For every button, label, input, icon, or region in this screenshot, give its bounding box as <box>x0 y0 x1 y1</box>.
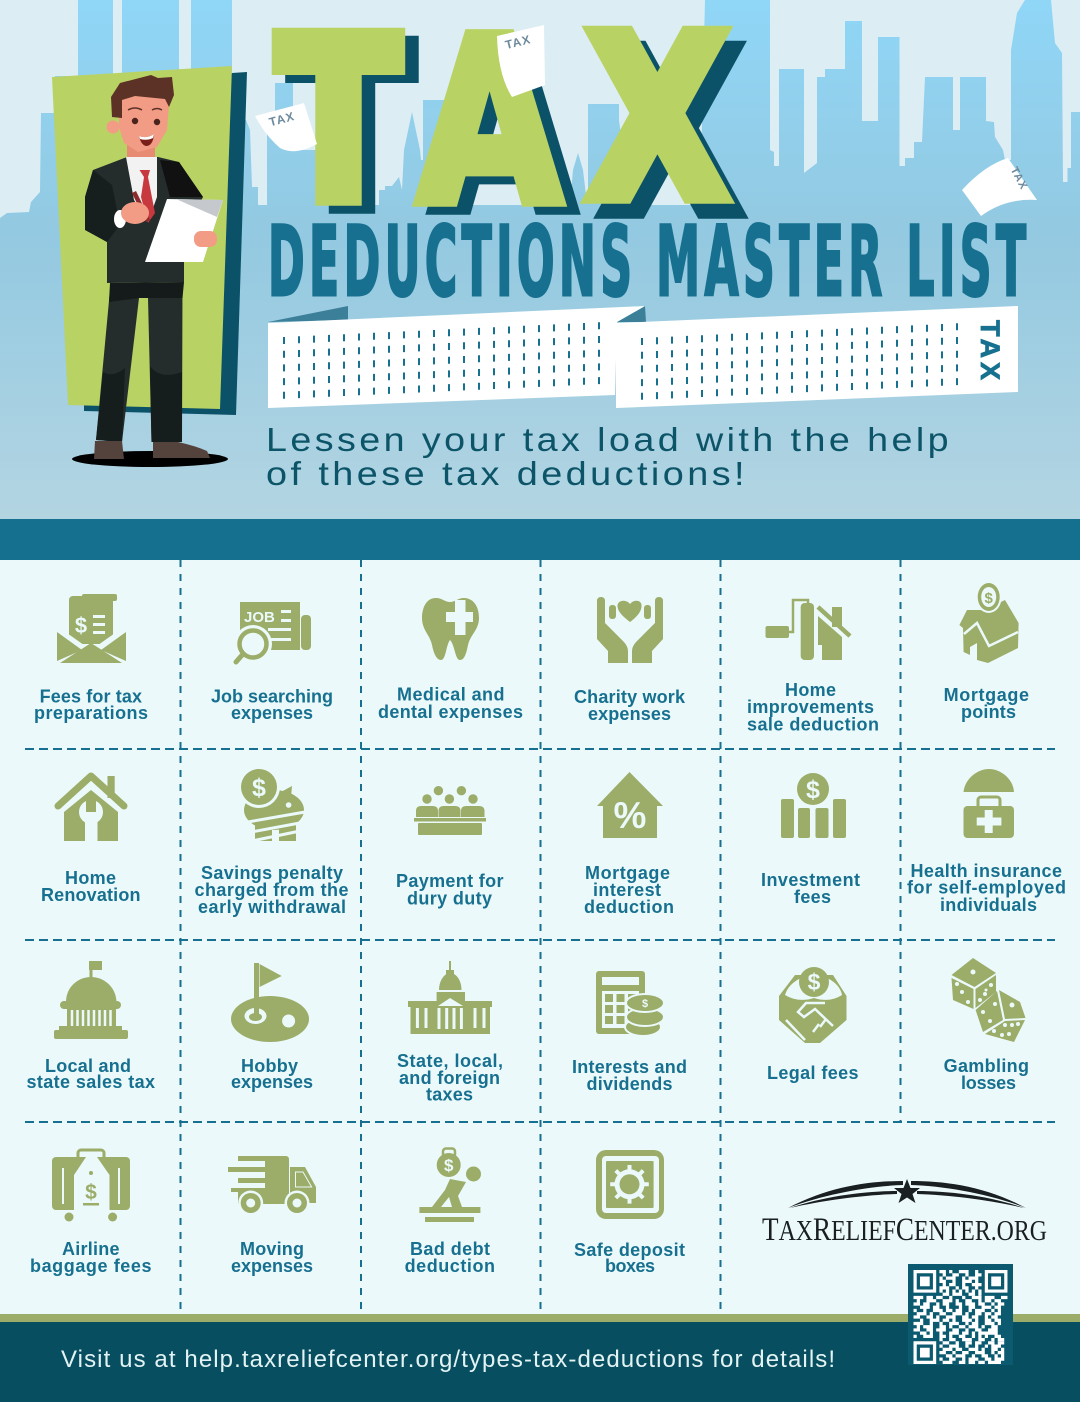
writing hand <box>114 202 149 228</box>
cell: job searching <box>211 602 333 723</box>
label: taxes <box>426 1084 473 1104</box>
label: baggage fees <box>30 1256 152 1276</box>
icon: piggy bank with coin: $ <box>252 774 266 802</box>
label <box>396 871 504 908</box>
cell: safe deposit boxes <box>574 1150 685 1276</box>
label: expenses <box>231 703 313 723</box>
icon: job newspaper and magnifier: JOB <box>244 609 275 626</box>
label: preparations <box>34 703 148 723</box>
cell: moving expenses <box>225 1151 316 1276</box>
jacket <box>85 157 203 283</box>
cell: fees for tax preparations <box>34 594 148 723</box>
tie <box>140 170 155 223</box>
label: Moving <box>240 1239 304 1259</box>
label: losses <box>961 1073 1016 1093</box>
icon: two dice <box>952 958 1026 1042</box>
icon: safe <box>596 1150 664 1219</box>
shirt <box>126 157 157 222</box>
label <box>26 1056 155 1092</box>
footer text: Visit us at help.taxreliefcenter.org/types-tax-deductions for details! <box>61 1346 835 1373</box>
label: Investment <box>761 870 860 890</box>
label <box>405 1239 495 1276</box>
cell: investment fees <box>761 770 860 907</box>
label <box>944 1056 1029 1093</box>
label: Safe deposit <box>574 1240 685 1260</box>
panel shadow <box>84 72 247 415</box>
icon: bars and coin: $ <box>806 776 820 804</box>
cell: state local foreign taxes <box>397 961 503 1104</box>
label: Fees for tax <box>40 686 142 706</box>
icon: government building <box>408 961 492 1034</box>
label <box>231 1239 313 1276</box>
flying paper on title <box>497 25 545 97</box>
label: for self-employed <box>907 878 1066 898</box>
label <box>761 870 860 907</box>
label <box>194 863 348 917</box>
flying paper left: TAX <box>268 109 296 129</box>
title TAX <box>277 0 740 264</box>
icon: envelope with bill: $ <box>75 613 87 638</box>
icon: house with coin: $ <box>985 590 994 607</box>
flying paper left <box>255 103 317 151</box>
icon: house with percent <box>597 772 663 838</box>
tagline: of these tax deductions! <box>266 455 748 492</box>
label <box>907 861 1066 915</box>
icon: umbrella over medical case <box>964 769 1014 838</box>
cell: legal fees <box>767 967 858 1083</box>
icon: delivery truck <box>225 1151 316 1216</box>
flying paper right: TAX <box>1008 165 1030 192</box>
clipboard <box>145 199 223 262</box>
shoes <box>94 441 210 459</box>
label: Savings penalty <box>201 863 343 883</box>
cell: mortgage interest <box>584 772 674 917</box>
icon: jury box <box>414 786 486 835</box>
logo: Tax Relief Center <box>762 1179 1047 1248</box>
icon: house with wrench <box>58 776 124 842</box>
city skyline <box>0 0 1080 519</box>
label <box>574 687 686 724</box>
label: deduction <box>584 897 674 917</box>
footer olive stripe <box>0 1314 1080 1322</box>
title letters <box>277 0 727 256</box>
cell: home improvements <box>747 600 879 734</box>
label: Airline <box>62 1239 120 1259</box>
cell: gambling losses <box>944 958 1029 1093</box>
man on green panel <box>52 66 247 467</box>
icon: hands holding heart <box>597 597 663 663</box>
label: expenses <box>231 1256 313 1276</box>
label <box>747 680 879 734</box>
label <box>572 1057 687 1094</box>
icon: tooth with cross <box>422 598 479 660</box>
panel: header <box>0 0 1080 519</box>
ribbon label: TAX <box>975 320 1005 380</box>
label <box>397 1051 503 1104</box>
ribbon ticks right <box>642 323 957 404</box>
label: Mortgage <box>944 685 1029 705</box>
cell: mortgage points <box>944 581 1029 722</box>
label: Medical and <box>397 684 504 704</box>
cell: local and state sales tax <box>26 961 155 1092</box>
label: boxes <box>605 1256 655 1276</box>
icon: house with coin <box>959 581 1019 663</box>
label: interest <box>593 880 661 900</box>
holding hand <box>194 231 217 247</box>
label: expenses <box>588 704 671 724</box>
cell: hobby expenses <box>231 963 313 1092</box>
title letter shadows: X <box>602 4 740 264</box>
icon: calculator and coins: $ <box>642 998 648 1010</box>
ground shadow <box>72 451 228 467</box>
label: dury duty <box>407 888 492 908</box>
icon: suitcase with tag: $ <box>85 1181 97 1204</box>
label: Hobby <box>241 1056 298 1076</box>
cell: payment for dury duty <box>396 786 504 908</box>
label <box>584 863 674 917</box>
teal band <box>0 519 1080 560</box>
label: early withdrawal <box>198 897 346 917</box>
label <box>211 686 333 723</box>
label <box>378 684 523 722</box>
icon: piggy bank with coin <box>238 766 305 841</box>
label: Charity work <box>574 687 686 707</box>
icon: domed capitol with flag <box>54 961 128 1039</box>
icon: person carrying debt weight: $ <box>444 1156 454 1175</box>
title letter shadows <box>291 0 740 264</box>
icon: house with percent: % <box>614 795 646 836</box>
pen <box>132 191 150 222</box>
label: points <box>961 702 1016 722</box>
tagline <box>266 421 952 492</box>
QR code <box>908 1264 1013 1365</box>
label <box>34 686 148 723</box>
label <box>30 1239 152 1276</box>
head <box>106 75 174 152</box>
cell: bad debt deduction <box>405 1148 495 1276</box>
label: Legal fees <box>767 1063 858 1083</box>
label <box>574 1240 685 1276</box>
label: Health insurance <box>910 861 1062 881</box>
icon: handshake and coin: $ <box>808 969 821 995</box>
logo: Tax Relief Center: TAXRELIEFCENTER.ORG <box>762 1212 1047 1248</box>
label: Bad debt <box>410 1239 490 1259</box>
label: Gambling <box>944 1056 1029 1076</box>
label: charged from the <box>194 880 348 900</box>
label: expenses <box>231 1072 313 1092</box>
cell: medical and dental <box>378 598 523 722</box>
flying paper on title: TAX <box>504 32 532 52</box>
label <box>41 868 140 905</box>
flying paper right <box>962 158 1037 216</box>
cell: interests and dividends <box>572 971 687 1094</box>
hair <box>111 75 174 118</box>
label: improvements <box>747 697 874 717</box>
cell: savings penalty <box>194 766 348 917</box>
cell: home renovation <box>41 776 140 905</box>
label: dividends <box>586 1074 672 1094</box>
label: deduction <box>405 1256 495 1276</box>
label: sale deduction <box>747 714 879 734</box>
label: Payment for <box>396 871 504 891</box>
panel: footer <box>0 1322 1080 1402</box>
cell: charity work <box>574 597 686 724</box>
cell: health insurance <box>907 769 1066 915</box>
label: Mortgage <box>585 863 670 883</box>
label: Local and <box>45 1056 131 1076</box>
label <box>944 685 1029 722</box>
label <box>231 1056 313 1092</box>
label: Home <box>65 868 116 888</box>
title letter shadows: A <box>431 0 575 264</box>
label: individuals <box>940 895 1037 915</box>
panel: deductions grid <box>0 560 1080 1314</box>
title letter shadows: T <box>291 0 413 259</box>
icon: paint roller and house <box>766 600 850 660</box>
ribbon banner <box>268 306 1018 408</box>
label: fees <box>794 887 831 907</box>
icon: golf flag and green <box>231 963 309 1042</box>
label: dental expenses <box>378 702 523 722</box>
trousers <box>96 282 184 442</box>
label: and foreign <box>399 1068 500 1088</box>
cell: airline baggage fees <box>30 1150 152 1276</box>
label: state sales tax <box>26 1072 155 1092</box>
label: Home <box>785 680 836 700</box>
tagline: Lessen your tax load with the help <box>266 421 952 458</box>
label: Job searching <box>211 686 333 706</box>
label: Renovation <box>41 885 140 905</box>
ribbon ticks left <box>284 322 599 403</box>
label: State, local, <box>397 1051 503 1071</box>
subtitle heading: DEDUCTIONS MASTER LIST <box>268 206 1026 318</box>
neck <box>127 142 155 162</box>
green panel <box>52 66 232 409</box>
label: Interests and <box>572 1057 687 1077</box>
